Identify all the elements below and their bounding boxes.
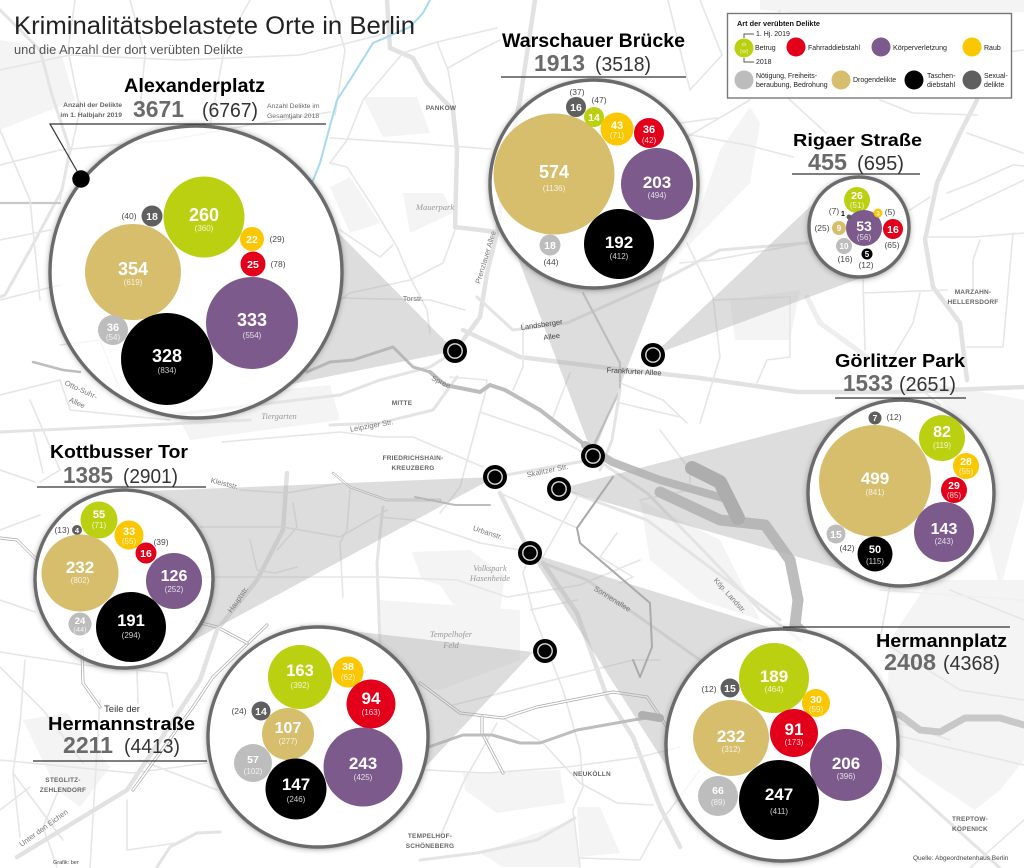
bubble: Sexualdelikte 18: (40) bbox=[121, 211, 137, 221]
heading: Warschauer Brücke bbox=[501, 31, 686, 77]
legend: Nötigung: Nötigung, Freiheits- bbox=[756, 73, 817, 80]
bubble: Raub 30: 30 bbox=[810, 694, 822, 706]
bubble: Nötigung 57 bbox=[234, 744, 272, 782]
map: place labels: Hauptstr. bbox=[226, 585, 250, 614]
legend: Betrug example: 2018 bbox=[756, 59, 772, 66]
bubble: Drogendelikte 107: (277) bbox=[279, 737, 298, 746]
bubble: Taschendiebstahl 247 bbox=[739, 760, 819, 840]
bubble: Betrug 14: 14 bbox=[588, 112, 600, 124]
bubble: Betrug 189: (464) bbox=[765, 685, 784, 694]
bubble: Drogendelikte 9: 9 bbox=[837, 224, 842, 233]
bubble: Raub 33: 33 bbox=[123, 526, 135, 538]
bubble: Fahrraddiebstahl 94: (163) bbox=[362, 708, 381, 717]
bubble: Taschendiebstahl 147 bbox=[266, 758, 326, 820]
bubble: Körperverletzung 243 bbox=[324, 728, 402, 806]
bubble: Fahrraddiebstahl 25 bbox=[240, 252, 286, 276]
bubble: Drogendelikte 354: (619) bbox=[124, 278, 143, 287]
bubble: Sexualdelikte 16: (37) bbox=[569, 87, 585, 97]
bubble: Taschendiebstahl 247: (411) bbox=[770, 807, 788, 816]
bubble: Drogendelikte 574: 574 bbox=[539, 162, 569, 182]
bubble: Sexualdelikte 14 bbox=[231, 702, 270, 720]
bubble: Betrug 55 bbox=[80, 502, 118, 538]
bubble: Fahrraddiebstahl 94 bbox=[346, 680, 396, 728]
legend title: Art der verübten Delikte bbox=[737, 21, 820, 28]
bubble: Raub 30: (59) bbox=[809, 705, 823, 714]
bubble: Drogendelikte 9: (25) bbox=[814, 223, 830, 233]
heading: Görlitzer Park: (2651) bbox=[899, 374, 956, 396]
bubble: Drogendelikte 354: 354 bbox=[118, 259, 148, 279]
legend: Sexualdelikte: delikte bbox=[984, 82, 1004, 89]
bubble: Taschendiebstahl 328: (834) bbox=[158, 366, 177, 375]
map: place labels: Sonnenallee bbox=[592, 584, 632, 614]
map: place labels: NEUKÖLLN bbox=[573, 769, 611, 778]
map: place labels: Volkspark bbox=[473, 563, 507, 573]
heading: Warschauer Brücke: 1913 bbox=[534, 50, 585, 76]
bubble: Drogendelikte 232 bbox=[42, 534, 118, 612]
annotation: full year 2018: Anzahl Delikte im bbox=[267, 103, 320, 110]
bubble: Betrug 163: (392) bbox=[291, 681, 310, 690]
bubble: Betrug 189: 189 bbox=[760, 667, 788, 686]
legend: Betrug example: Betrug bbox=[755, 45, 776, 52]
bubble: Taschendiebstahl 328: 328 bbox=[152, 346, 182, 366]
bubble: Körperverletzung 143: 143 bbox=[931, 521, 957, 538]
map: place labels: PANKOW bbox=[426, 105, 457, 112]
bubble: Körperverletzung 206 bbox=[810, 729, 882, 801]
bubble: Raub 28: 28 bbox=[960, 456, 972, 468]
bubble: Nötigung 18: 18 bbox=[544, 240, 556, 252]
legend: Taschendiebstahl bbox=[904, 70, 956, 90]
map: place labels: Hasenheide bbox=[469, 573, 510, 583]
map: place labels: Tiergarten bbox=[261, 411, 297, 421]
bubble: Drogendelikte 232: (802) bbox=[71, 576, 90, 585]
legend: Drogendelikte: Drogendelikte bbox=[853, 77, 896, 84]
bubble: Sexualdelikte 15 bbox=[701, 678, 740, 698]
bubble: Raub 43: (71) bbox=[610, 131, 624, 140]
bubble: Drogendelikte 232: 232 bbox=[717, 727, 745, 746]
bubble: Betrug 260 bbox=[164, 176, 244, 258]
map: place labels: Feld bbox=[442, 640, 460, 650]
bubble: Taschendiebstahl 147: (246) bbox=[287, 795, 306, 804]
bubble: Körperverletzung 143 bbox=[914, 502, 974, 562]
bubble: Nötigung 10: 10 bbox=[840, 242, 849, 251]
bubble: Drogendelikte 354 bbox=[85, 224, 181, 320]
map: place labels: Landsberger bbox=[520, 317, 564, 332]
bubble: Betrug 14: (47) bbox=[591, 95, 607, 105]
bubble: Taschendiebstahl 192: 192 bbox=[605, 233, 633, 252]
map: place labels: TEMPELHOF- bbox=[408, 833, 452, 840]
map: place labels: HELLERSDORF bbox=[948, 299, 998, 306]
bubble: Sexualdelikte 18 bbox=[121, 206, 162, 226]
legend: Taschendiebstahl: diebstahl bbox=[927, 82, 955, 89]
bubble: Fahrraddiebstahl 16 bbox=[883, 219, 903, 250]
heading: Kottbusser Tor: Kottbusser Tor bbox=[50, 441, 188, 462]
heading: Kottbusser Tor: (2901) bbox=[123, 466, 178, 488]
heading: Hermannstraße: (4413) bbox=[124, 736, 180, 758]
legend: Betrug example: (xx) bbox=[740, 49, 748, 55]
bubble: Fahrraddiebstahl 36: 36 bbox=[643, 124, 655, 136]
bubble: Fahrraddiebstahl 29: (85) bbox=[947, 491, 961, 500]
bubble: Raub 22 bbox=[240, 227, 285, 251]
bubble: Raub 30 bbox=[802, 689, 830, 717]
bubble: Betrug 163 bbox=[268, 645, 332, 709]
bubble: Nötigung 18 bbox=[540, 234, 560, 267]
bubble: Fahrraddiebstahl 16 bbox=[136, 537, 169, 564]
map: place labels: MARZAHN- bbox=[955, 289, 991, 296]
map: river Panke bbox=[312, 0, 430, 183]
annotation: first half 2019: Anzahl der Delikte bbox=[63, 102, 122, 109]
bubble: Betrug 26: 26 bbox=[851, 190, 863, 202]
bubble: Fahrraddiebstahl 29 bbox=[941, 477, 967, 503]
map: place labels: Spree bbox=[430, 373, 452, 390]
bubble: Raub 28 bbox=[953, 453, 979, 479]
bubble: Drogendelikte 499: 499 bbox=[861, 469, 889, 488]
bubble: Betrug 163: 163 bbox=[286, 662, 314, 680]
map: place labels: ZEHLENDORF bbox=[40, 787, 86, 794]
heading: Görlitzer Park bbox=[835, 351, 966, 398]
legend: Betrug example: 1. Hj. 2019 bbox=[756, 31, 790, 38]
bubble: Drogendelikte 232: 232 bbox=[66, 558, 94, 577]
map: place labels: KÖPENICK bbox=[952, 824, 988, 833]
bubble: Fahrraddiebstahl 91 bbox=[770, 709, 818, 757]
bubble: Betrug 260: (360) bbox=[195, 224, 214, 233]
bubble: Körperverletzung 206: (396) bbox=[837, 772, 856, 781]
bubble: Taschendiebstahl 5: 5 bbox=[865, 250, 870, 259]
bubble: Taschendiebstahl 247: 247 bbox=[765, 785, 793, 804]
map: place labels: Str. des 17. Juni bbox=[203, 394, 258, 411]
bubble: Betrug 260: 260 bbox=[189, 205, 219, 225]
bubble: Betrug 55: 55 bbox=[93, 509, 105, 521]
bubble: Nötigung 36: 36 bbox=[107, 322, 119, 334]
bubble: Sexualdelikte 4: 4 bbox=[75, 526, 80, 535]
legend: Körperverletzung bbox=[872, 38, 947, 56]
bubble: Sexualdelikte 14: (24) bbox=[231, 706, 247, 716]
bubble: Betrug 55: (71) bbox=[92, 521, 106, 530]
bubble: Körperverletzung 203: 203 bbox=[643, 173, 671, 192]
bubble: Körperverletzung 126: 126 bbox=[161, 568, 187, 585]
bubble: Körperverletzung 333: 333 bbox=[237, 310, 267, 330]
bubble: Raub 38: 38 bbox=[342, 661, 354, 673]
bubble: Körperverletzung 203 bbox=[621, 148, 693, 220]
heading: Alexanderplatz: 3671 bbox=[133, 96, 184, 122]
bubble: Sexualdelikte 16 bbox=[566, 87, 586, 117]
bubble: Körperverletzung 53: 53 bbox=[856, 218, 872, 234]
bubble: Nötigung 24 bbox=[68, 612, 92, 636]
bubble: Drogendelikte 107 bbox=[262, 708, 314, 760]
heading: Hermannplatz: 2408 bbox=[884, 649, 936, 675]
legend: Fahrraddiebstahl: Fahrraddiebstahl bbox=[808, 45, 860, 52]
legend: Körperverletzung: Körperverletzung bbox=[893, 45, 947, 52]
bubble: Körperverletzung 53 bbox=[846, 210, 882, 246]
heading: Hermannplatz bbox=[783, 627, 1010, 675]
map: place labels: Leipziger Str. bbox=[349, 417, 394, 434]
bubble: Sexualdelikte 7: 7 bbox=[873, 413, 878, 423]
bubble: Raub 3 bbox=[874, 207, 895, 218]
map: place labels: Grafik: ber bbox=[53, 860, 79, 866]
map: place labels: Otto-Suhr- bbox=[63, 378, 99, 401]
legend: Nötigung bbox=[734, 70, 828, 90]
bubble: Nötigung 15: 15 bbox=[830, 529, 842, 541]
legend: Sexualdelikte: Sexual- bbox=[984, 73, 1008, 80]
bubble: Raub 22: 22 bbox=[246, 234, 258, 246]
bubble: Raub 3: 3 bbox=[876, 210, 880, 218]
bubble: Körperverletzung 126 bbox=[146, 553, 202, 609]
bubble: Nötigung 66: (89) bbox=[711, 798, 725, 807]
heading: Rigaer Straße: Rigaer Straße bbox=[793, 130, 922, 150]
bubble: Betrug 14 bbox=[584, 95, 607, 127]
legend: Nötigung: beraubung, Bedrohung bbox=[756, 82, 828, 89]
bubble: Sexualdelikte 14: 14 bbox=[255, 706, 267, 718]
map: place labels: Kleiststr. bbox=[210, 476, 239, 491]
panel: Alexanderplatz bbox=[50, 76, 326, 405]
heading: Hermannplatz: (4368) bbox=[943, 653, 1000, 675]
panel: Görlitzer Park bbox=[819, 351, 979, 572]
bubble: Fahrraddiebstahl 16: 16 bbox=[887, 224, 899, 236]
bubble: Sexualdelikte 15: 15 bbox=[724, 683, 736, 695]
map: place labels: MITTE bbox=[392, 400, 413, 407]
bubble: Sexualdelikte 15: (12) bbox=[701, 684, 717, 694]
bubble: Nötigung 24: 24 bbox=[75, 616, 86, 627]
bubble: Betrug 26 bbox=[844, 187, 870, 213]
map: place labels: TREPTOW- bbox=[952, 816, 988, 823]
bubble: Betrug 26: (51) bbox=[850, 201, 864, 210]
bubble: Nötigung 15 bbox=[826, 524, 855, 553]
bubble: Körperverletzung 206: 206 bbox=[832, 754, 860, 773]
bubble: Drogendelikte 574: (1136) bbox=[543, 184, 566, 193]
map: place labels: Frankfurter Allee bbox=[606, 366, 662, 377]
bubble: Taschendiebstahl 50 bbox=[858, 536, 892, 572]
bubble: Taschendiebstahl 192: (412) bbox=[610, 252, 629, 261]
bubble: Sexualdelikte 18: 18 bbox=[146, 211, 158, 223]
bubble: Fahrraddiebstahl 16: (65) bbox=[884, 240, 900, 250]
bubble: Sexualdelikte 4: (13) bbox=[54, 525, 70, 535]
bubble: Fahrraddiebstahl 91: (173) bbox=[785, 738, 804, 747]
bubble: Nötigung 57: 57 bbox=[247, 754, 259, 766]
bubble: Raub 38 bbox=[332, 656, 364, 688]
bubble: Körperverletzung 143: (243) bbox=[935, 537, 954, 546]
legend bbox=[728, 14, 1012, 98]
heading: Warschauer Brücke: Warschauer Brücke bbox=[502, 31, 685, 52]
map: place labels: Skalitzer Str. bbox=[526, 462, 569, 479]
panel: Kottbusser Tor bbox=[37, 441, 206, 662]
bubble: Raub 22: (29) bbox=[269, 234, 285, 244]
bubble: Körperverletzung 333: (554) bbox=[243, 331, 262, 340]
bubble: Drogendelikte 574 bbox=[494, 114, 614, 234]
bubble: Drogendelikte 9 bbox=[814, 221, 846, 235]
bubble: Fahrraddiebstahl 94: 94 bbox=[362, 689, 381, 708]
bubble: Raub 28: (55) bbox=[959, 467, 973, 476]
bubble: Taschendiebstahl 191 bbox=[96, 592, 166, 662]
heading: Kottbusser Tor: 1385 bbox=[63, 462, 113, 488]
bubble: Körperverletzung 53: (56) bbox=[857, 233, 871, 242]
bubble: Nötigung 66: 66 bbox=[712, 785, 724, 797]
bubble: Fahrraddiebstahl 16: (39) bbox=[153, 537, 169, 547]
bubble: Drogendelikte 499 bbox=[819, 425, 931, 537]
bubble: Taschendiebstahl 147: 147 bbox=[282, 775, 310, 794]
bubble: Nötigung 18: (44) bbox=[543, 257, 559, 267]
bubble: Betrug 189 bbox=[739, 643, 809, 713]
heading: Warschauer Brücke: (3518) bbox=[595, 54, 651, 76]
bubble: Körperverletzung 243: (425) bbox=[354, 773, 373, 782]
title: Kriminalitätsbelastete Orte in Berlin bbox=[14, 12, 415, 40]
bubble: Nötigung 15: (42) bbox=[839, 543, 855, 553]
legend: Sexualdelikte bbox=[962, 70, 1008, 90]
bubble: Sexualdelikte 7 bbox=[868, 412, 902, 424]
map: place labels: Allee bbox=[543, 331, 561, 342]
bubble: Taschendiebstahl 50: (115) bbox=[866, 557, 884, 566]
bubble: Nötigung 57: (102) bbox=[244, 767, 263, 776]
bubble: Sexualdelikte 7: (12) bbox=[886, 412, 902, 422]
legend: Fahrraddiebstahl bbox=[786, 38, 860, 56]
map: place labels: KREUZBERG bbox=[392, 465, 434, 472]
heading: Görlitzer Park: Görlitzer Park bbox=[835, 351, 966, 371]
bubble: Sexualdelikte 1: (7) bbox=[829, 206, 839, 216]
map: place labels: SCHÖNEBERG bbox=[406, 841, 454, 850]
bubble: Nötigung 66 bbox=[698, 776, 738, 816]
map markers bbox=[443, 339, 665, 663]
bubble: Drogendelikte 232: (312) bbox=[722, 745, 741, 754]
bubble: Fahrraddiebstahl 29: 29 bbox=[948, 480, 960, 492]
heading: Kottbusser Tor bbox=[37, 441, 206, 488]
map: river Spree bbox=[33, 347, 1024, 750]
legend: Drogendelikte bbox=[832, 70, 896, 90]
heading: Rigaer Straße: 455 bbox=[808, 149, 847, 175]
map: place labels: Tempelhofer bbox=[430, 629, 473, 639]
map: connection wedges bbox=[100, 132, 902, 840]
bubble: Raub 38: (62) bbox=[341, 673, 355, 682]
bubble: Taschendiebstahl 5: (12) bbox=[858, 260, 874, 270]
bubble: Nötigung 24: (44) bbox=[73, 625, 87, 634]
bubble: Körperverletzung 333 bbox=[206, 277, 298, 369]
bubble: Sexualdelikte 4 bbox=[54, 525, 82, 535]
bubble: Taschendiebstahl 50: 50 bbox=[869, 544, 881, 556]
heading: Hermannplatz: Hermannplatz bbox=[876, 630, 1007, 651]
panel: Hermannstraße bbox=[33, 645, 402, 820]
legend: Raub bbox=[962, 38, 1001, 56]
bubble: Fahrraddiebstahl 25: 25 bbox=[247, 259, 259, 271]
heading: Alexanderplatz: Alexanderplatz bbox=[124, 76, 265, 97]
bubble: Nötigung 10 bbox=[836, 238, 853, 264]
bubble: Taschendiebstahl 191: 191 bbox=[117, 612, 145, 630]
bubble: Taschendiebstahl 191: (294) bbox=[122, 631, 141, 640]
annotation: full year 2018: Gesamtjahr 2018 bbox=[267, 113, 319, 120]
bubble: Fahrraddiebstahl 91: 91 bbox=[785, 720, 803, 739]
faint roads showing through the lenses bbox=[52, 115, 896, 796]
bubble: Körperverletzung 126: (252) bbox=[165, 585, 184, 594]
bubble: Taschendiebstahl 5 bbox=[858, 248, 874, 270]
bubble: Raub 33 bbox=[114, 520, 144, 550]
map: place labels: Unter den Eichen bbox=[17, 807, 70, 849]
legend: Taschendiebstahl: Taschen- bbox=[927, 73, 955, 80]
heading: Alexanderplatz bbox=[50, 76, 326, 188]
bubble: Betrug 82: 82 bbox=[933, 424, 951, 441]
map: place labels: STEGLITZ- bbox=[45, 777, 81, 784]
legend: Raub: Raub bbox=[984, 45, 1001, 52]
bubble: Raub 3: (5) bbox=[885, 207, 895, 217]
map: place labels: Quelle: Abgeordnetenhaus Berlin bbox=[913, 855, 1009, 862]
bubble: Sexualdelikte 16: 16 bbox=[570, 102, 582, 114]
panel: Hermannplatz bbox=[693, 627, 1010, 840]
heading: Alexanderplatz: (6767) bbox=[202, 100, 258, 122]
bubble: Taschendiebstahl 192 bbox=[584, 209, 654, 279]
subtitle: und die Anzahl der dort verübten Delikte bbox=[14, 43, 243, 57]
bubble: Drogendelikte 107: 107 bbox=[275, 720, 301, 737]
bubble: Fahrraddiebstahl 16: 16 bbox=[140, 548, 152, 560]
map: place labels: Urbanstr. bbox=[472, 524, 504, 542]
bubble: Nötigung 10: (16) bbox=[837, 254, 853, 264]
bubble: Körperverletzung 243: 243 bbox=[349, 754, 377, 773]
heading: Hermannstraße bbox=[33, 704, 207, 761]
bubble: Raub 43 bbox=[600, 112, 634, 146]
bubble: Drogendelikte 232 bbox=[693, 700, 769, 776]
bubble: Sexualdelikte 1: 1 bbox=[841, 211, 845, 218]
heading: Hermannstraße: Teile der bbox=[104, 704, 140, 715]
map: place labels: Mauerpark bbox=[415, 202, 454, 212]
bubble: Betrug 82: (119) bbox=[933, 441, 951, 450]
panel: Warschauer Brücke bbox=[494, 31, 693, 279]
bubble: Körperverletzung 203: (494) bbox=[648, 191, 667, 200]
bubble: Fahrraddiebstahl 36 bbox=[634, 118, 664, 148]
panel: Rigaer Straße bbox=[792, 130, 922, 270]
bubble: Taschendiebstahl 328 bbox=[121, 313, 213, 405]
bubble: Nötigung 36 bbox=[98, 315, 128, 345]
map: place labels: Köp. Landstr. bbox=[712, 576, 748, 615]
map: place labels: FRIEDRICHSHAIN- bbox=[383, 455, 443, 462]
map: place labels: Torstr. bbox=[403, 294, 423, 303]
bubble: Sexualdelikte 1 bbox=[829, 206, 852, 220]
heading: Rigaer Straße: (695) bbox=[857, 153, 904, 175]
heading: Hermannstraße: 2211 bbox=[63, 732, 113, 758]
bubble: Raub 43: 43 bbox=[611, 120, 623, 132]
heading: Hermannstraße: Hermannstraße bbox=[48, 713, 195, 734]
legend: Betrug example bbox=[734, 31, 790, 66]
map: place labels: Prenzlauer Allee bbox=[473, 230, 498, 285]
heading: Rigaer Straße bbox=[792, 130, 922, 175]
bubble: Nötigung 36: (54) bbox=[106, 333, 120, 342]
legend: Betrug example: xx bbox=[742, 42, 747, 48]
bubble: Drogendelikte 499: (841) bbox=[866, 488, 885, 497]
bubble: Fahrraddiebstahl 25: (78) bbox=[270, 259, 286, 269]
heading: Görlitzer Park: 1533 bbox=[843, 370, 893, 396]
bubble: Fahrraddiebstahl 36: (42) bbox=[642, 136, 656, 145]
annotation: first half 2019: im 1. Halbjahr 2019 bbox=[60, 112, 122, 119]
bubble: Raub 33: (55) bbox=[122, 537, 136, 546]
map: place labels: Allee bbox=[68, 395, 87, 410]
bubble: Betrug 82 bbox=[919, 415, 965, 461]
